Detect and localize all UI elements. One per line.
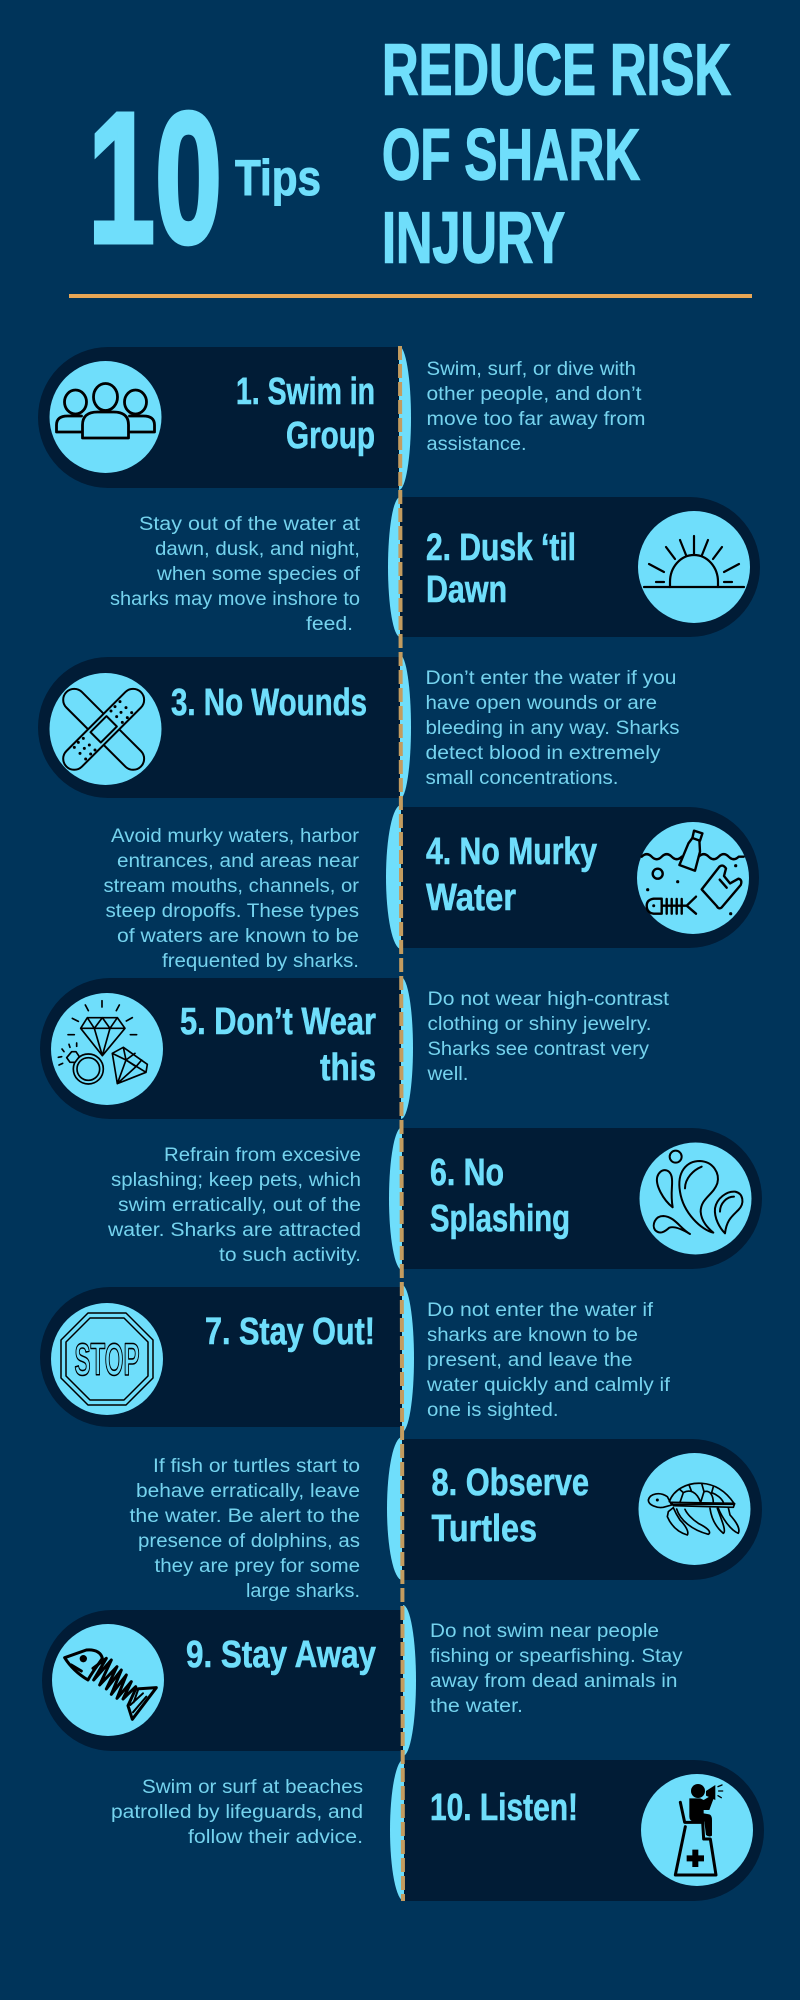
title xyxy=(382,30,731,278)
description: tip 4: Avoid murky waters, harbor xyxy=(111,826,360,847)
panel: tip 10 xyxy=(111,1759,764,1901)
description: tip 2: when some species of xyxy=(156,564,361,585)
description: tip 8 xyxy=(130,1456,360,1602)
panel: tip 9 xyxy=(42,1605,683,1756)
panel: tip 2 xyxy=(110,497,760,637)
description: tip 3: have open wounds or are xyxy=(426,693,657,714)
description: tip 8: If fish or turtles start to xyxy=(153,1456,360,1477)
heading: tip 5: this xyxy=(320,1047,376,1089)
description: tip 2: dawn, dusk, and night, xyxy=(155,539,360,560)
heading: tip 8: 8. Observe xyxy=(432,1462,589,1504)
description: tip 6: splashing; keep pets, which xyxy=(111,1170,361,1191)
description: tip 3: Don’t enter the water if you xyxy=(426,668,676,689)
description: tip 2: Stay out of the water at xyxy=(139,514,361,535)
icon: group of people xyxy=(56,384,154,438)
description: tip 10: follow their advice. xyxy=(188,1827,363,1848)
description: tip 8: they are prey for some xyxy=(154,1556,360,1577)
panel: tip 6 xyxy=(107,1127,762,1270)
description: tip 8: behave erratically, leave xyxy=(136,1481,360,1502)
description: tip 8: the water. Be alert to the xyxy=(130,1506,360,1527)
icon: sunset xyxy=(644,536,744,587)
heading: tip 10: 10. Listen! xyxy=(430,1787,578,1829)
description: tip 3 xyxy=(426,668,680,789)
heading: tip 5: 5. Don’t Wear xyxy=(180,1001,376,1043)
description: tip 6: to such activity. xyxy=(219,1245,361,1266)
description: tip 7: water quickly and calmly if xyxy=(426,1375,671,1396)
heading: tip 4 xyxy=(426,831,597,919)
description: tip 8: large sharks. xyxy=(246,1581,360,1602)
heading: tip 2: Dawn xyxy=(426,569,507,611)
panel: tip 5 xyxy=(40,977,670,1119)
heading: tip 1 xyxy=(236,371,375,457)
description: tip 1: Swim, surf, or dive with xyxy=(426,359,636,380)
description: tip 2: feed. xyxy=(306,614,353,635)
icon: crossed bandages xyxy=(59,684,149,774)
description: tip 7: Do not enter the water if xyxy=(427,1300,654,1321)
title: OF SHARK xyxy=(382,116,640,196)
description: tip 5: well. xyxy=(426,1064,468,1085)
description: tip 5: Sharks see contrast very xyxy=(428,1039,650,1060)
icon: stop sign xyxy=(61,1313,153,1405)
description: tip 10: patrolled by lifeguards, and xyxy=(111,1802,363,1823)
description: tip 1: assistance. xyxy=(426,434,526,455)
heading: tip 4: Water xyxy=(426,877,516,919)
description: tip 4: steep dropoffs. These types xyxy=(106,901,359,922)
description: tip 4: frequented by sharks. xyxy=(162,951,359,972)
description: tip 7: one is sighted. xyxy=(427,1400,558,1421)
description: tip 1: other people, and don’t xyxy=(426,384,642,405)
description: tip 10: Swim or surf at beaches xyxy=(142,1777,363,1798)
description: tip 6: water. Sharks are attracted xyxy=(107,1220,361,1241)
description: tip 7: present, and leave the xyxy=(427,1350,632,1371)
heading: tip 6: Splashing xyxy=(430,1198,570,1240)
description: tip 1: move too far away from xyxy=(426,409,646,430)
description: tip 4 xyxy=(104,826,360,972)
description: tip 10 xyxy=(111,1777,363,1848)
description: tip 7 xyxy=(426,1300,671,1421)
icon: fish skeleton xyxy=(65,1650,156,1719)
description: tip 4: entrances, and areas near xyxy=(117,851,360,872)
heading: tip 7: 7. Stay Out! xyxy=(205,1311,375,1353)
description: tip 9 xyxy=(430,1621,683,1717)
description: tip 9: fishing or spearfishing. Stay xyxy=(430,1646,683,1667)
heading: tip 8: Turtles xyxy=(432,1508,537,1550)
heading: tip 8 xyxy=(432,1462,589,1550)
heading: tip 6 xyxy=(430,1152,570,1240)
icon: polluted water xyxy=(642,831,744,915)
icon: stop sign: STOP xyxy=(74,1334,140,1385)
heading: tip 5 xyxy=(180,1001,376,1089)
heading: tip 1: 1. Swim in xyxy=(236,371,375,413)
header: 10 Tips: Tips xyxy=(235,150,321,206)
title: INJURY xyxy=(382,198,565,278)
description: tip 9: away from dead animals in xyxy=(430,1671,678,1692)
description: tip 9: the water. xyxy=(430,1696,523,1717)
icon: water splash xyxy=(654,1151,742,1234)
description: tip 4: of waters are known to be xyxy=(117,926,359,947)
description: tip 3: small concentrations. xyxy=(426,768,618,789)
panel: tip 4 xyxy=(104,805,759,972)
heading: tip 4: 4. No Murky xyxy=(426,831,597,873)
description: tip 6: swim erratically, out of the xyxy=(118,1195,361,1216)
panel: tip 8 xyxy=(130,1437,762,1602)
panel: tip 3 xyxy=(38,655,680,799)
description: tip 8: presence of dolphins, as xyxy=(138,1531,360,1552)
heading: tip 2: 2. Dusk ‘til xyxy=(426,527,576,569)
header: 10 Tips: 10 xyxy=(88,75,222,282)
timeline dashed spine xyxy=(400,346,403,1901)
heading: tip 6: 6. No xyxy=(430,1152,504,1194)
heading: tip 2 xyxy=(426,527,576,611)
description: tip 6 xyxy=(107,1145,361,1266)
icon: lifeguard with megaphone xyxy=(675,1784,723,1875)
description: tip 1 xyxy=(426,359,646,455)
description: tip 5: Do not wear high-contrast xyxy=(428,989,670,1010)
description: tip 4: stream mouths, channels, or xyxy=(104,876,360,897)
heading: tip 9: 9. Stay Away xyxy=(186,1634,376,1676)
description: tip 2: sharks may move inshore to xyxy=(110,589,360,610)
description: tip 5: clothing or shiny jewelry. xyxy=(428,1014,652,1035)
icon: jewelry xyxy=(58,1001,147,1084)
heading: tip 1: Group xyxy=(286,415,375,457)
description: tip 3: detect blood in extremely xyxy=(426,743,661,764)
panel: tip 1 xyxy=(38,346,646,490)
description: tip 7: sharks are known to be xyxy=(427,1325,638,1346)
description: tip 6: Refrain from excesive xyxy=(164,1145,361,1166)
description: tip 9: Do not swim near people xyxy=(430,1621,659,1642)
icon: sea turtle xyxy=(648,1483,739,1535)
panel: tip 7 xyxy=(40,1285,671,1432)
heading: tip 3: 3. No Wounds xyxy=(171,682,367,724)
orange divider xyxy=(69,294,752,298)
description: tip 2 xyxy=(110,514,361,635)
description: tip 5 xyxy=(426,989,670,1085)
description: tip 3: bleeding in any way. Sharks xyxy=(426,718,680,739)
